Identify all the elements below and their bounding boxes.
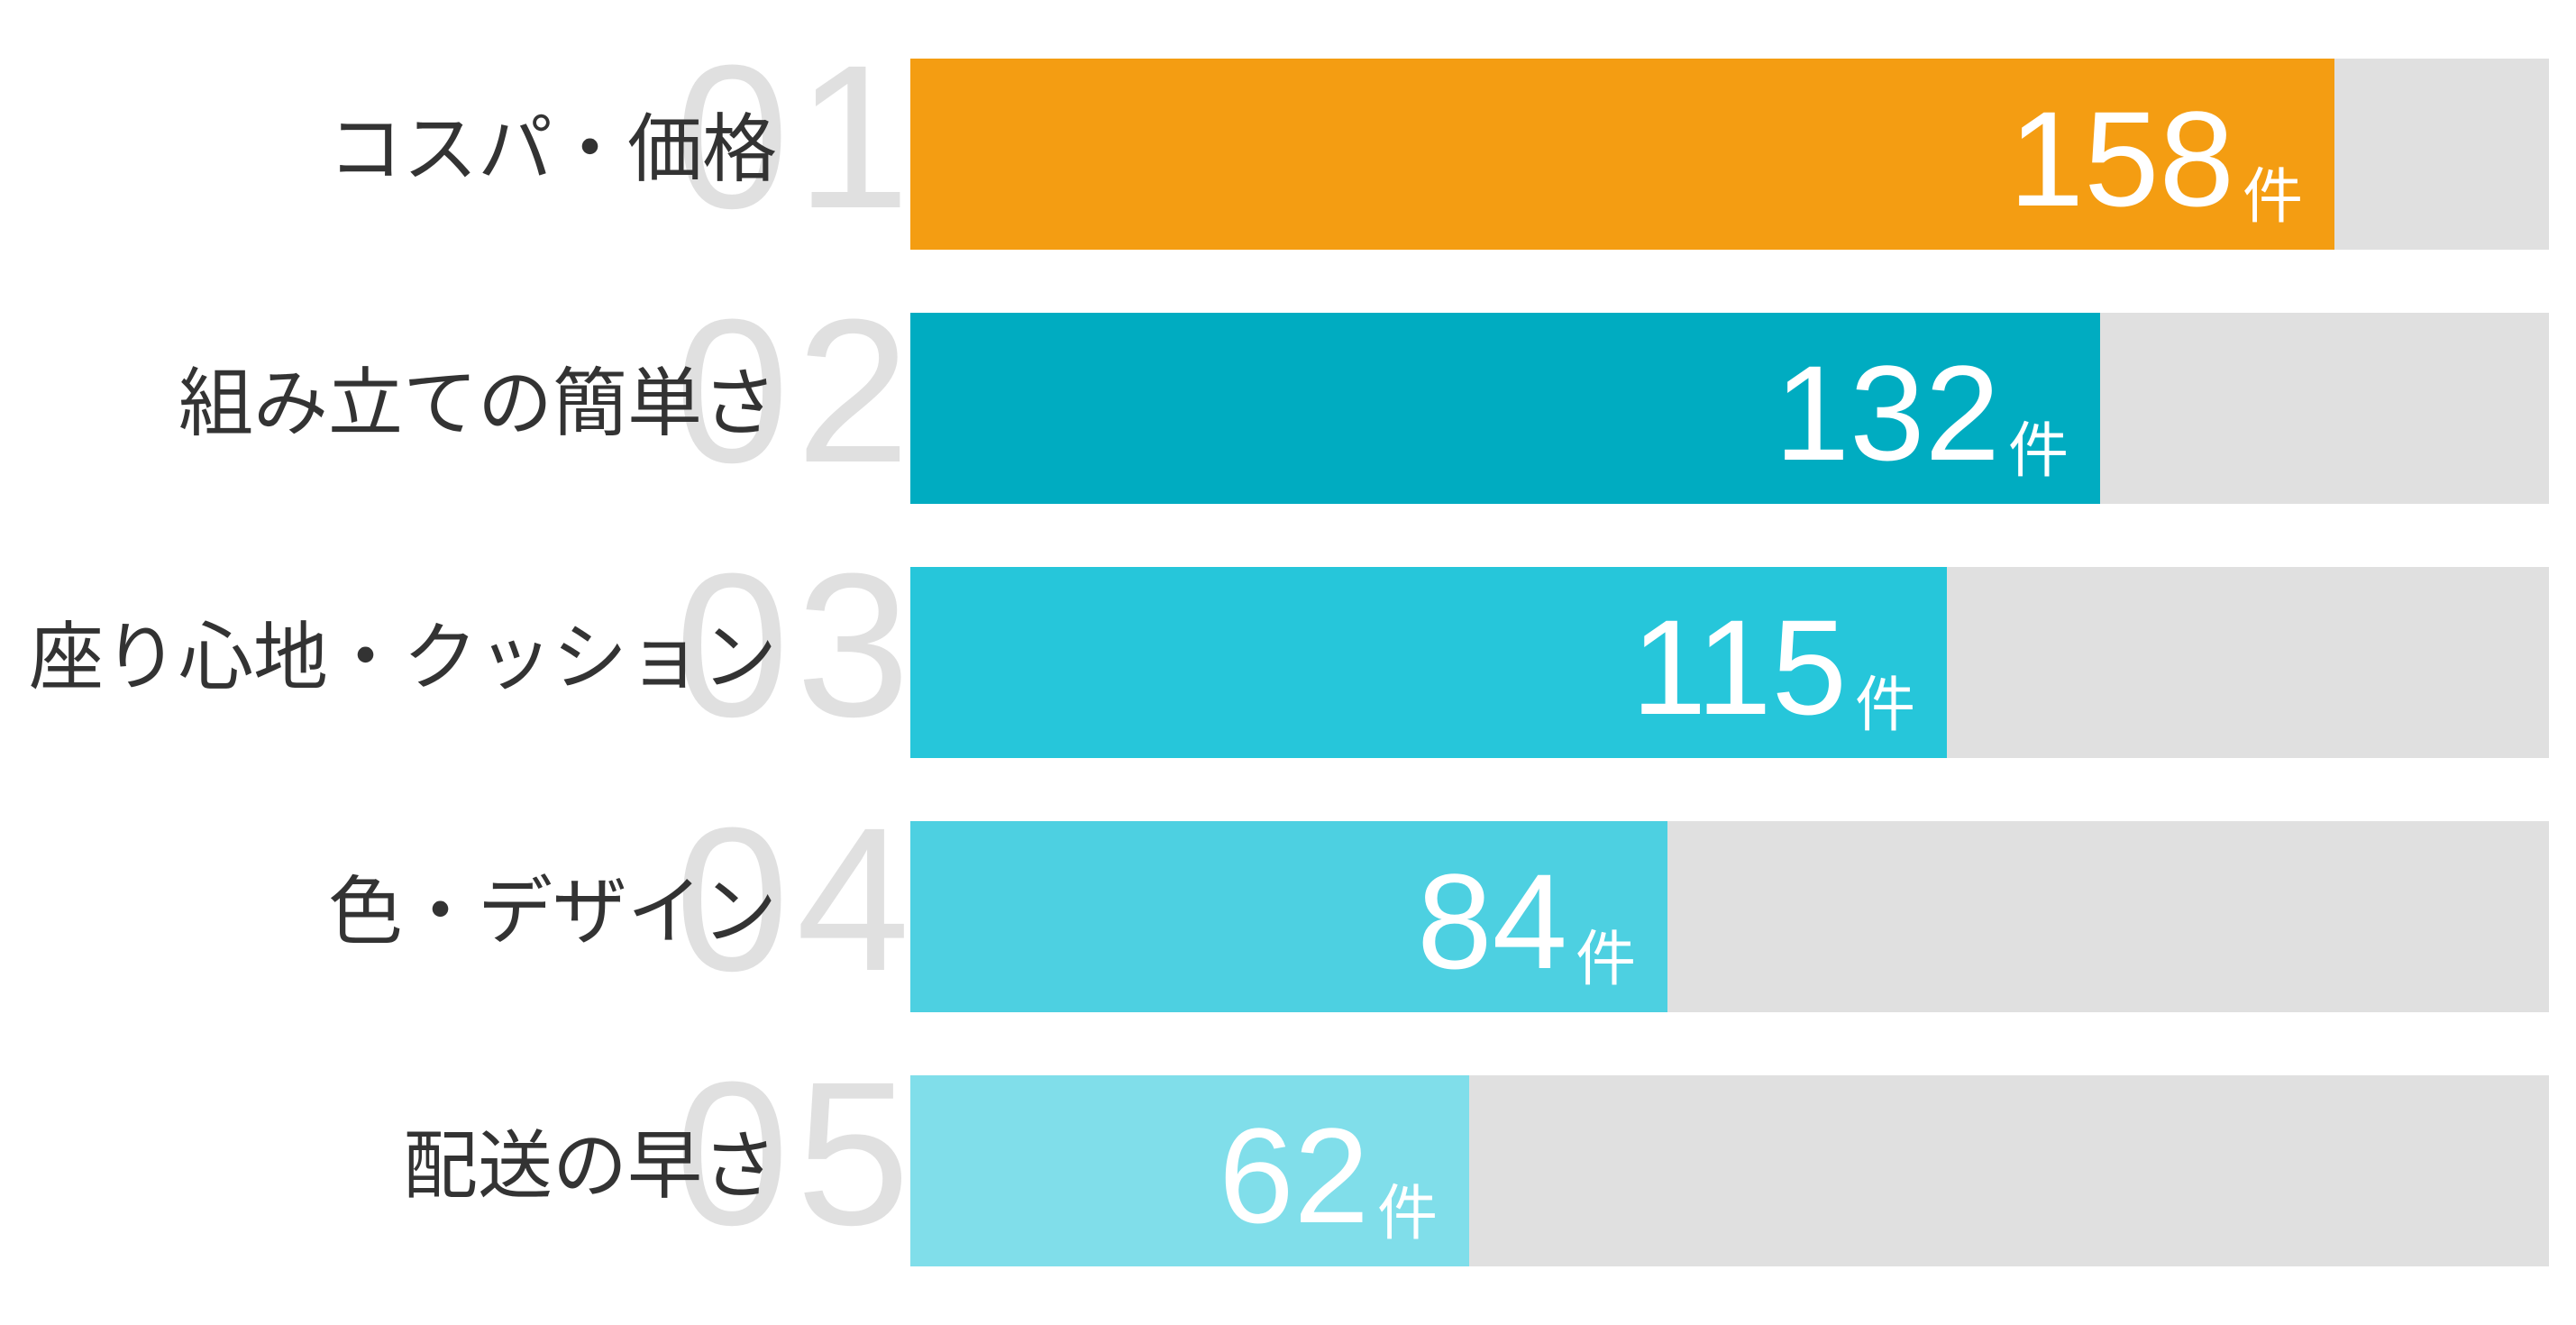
category label 5: 配送の早さ	[403, 1124, 777, 1208]
rank number 05: 05	[675, 1040, 918, 1268]
value 158: 158	[2009, 83, 2234, 234]
bar value 115	[910, 567, 1947, 758]
bar value 84	[910, 821, 1667, 1012]
rank number 04: 04	[675, 786, 918, 1014]
rank number 02: 02	[675, 278, 918, 506]
value 115: 115	[1631, 591, 1847, 743]
row 3: seating comfort and cushion	[29, 532, 2549, 760]
row 4: colour and design	[328, 786, 2549, 1014]
bar track 3	[910, 567, 2549, 758]
category label 3: 座り心地・クッション	[29, 616, 777, 699]
rank number 01: 01	[675, 23, 918, 251]
bar value 62	[910, 1075, 1469, 1266]
value 62: 62	[1219, 1100, 1369, 1251]
unit 3: 件	[1855, 672, 1915, 739]
bar track 1	[910, 59, 2549, 250]
category label 1: コスパ・価格	[328, 107, 777, 191]
bar track 2	[910, 313, 2549, 504]
value 132: 132	[1775, 337, 2000, 489]
category label 4: 色・デザイン	[328, 870, 777, 954]
row 2: ease of assembly	[178, 278, 2549, 506]
bar track 4	[910, 821, 2549, 1012]
unit 1: 件	[2243, 163, 2303, 231]
bar value 158	[910, 59, 2334, 250]
row 1: cost performance	[328, 23, 2549, 251]
unit 2: 件	[2008, 417, 2069, 485]
bar value 132	[910, 313, 2100, 504]
category label 2: 組み立ての簡単さ	[178, 361, 777, 445]
bar track 5	[910, 1075, 2549, 1266]
unit 5: 件	[1377, 1180, 1438, 1247]
rank number 03: 03	[675, 532, 918, 760]
row 5: delivery speed	[403, 1040, 2549, 1268]
unit 4: 件	[1576, 926, 1636, 993]
value 84: 84	[1417, 845, 1567, 997]
